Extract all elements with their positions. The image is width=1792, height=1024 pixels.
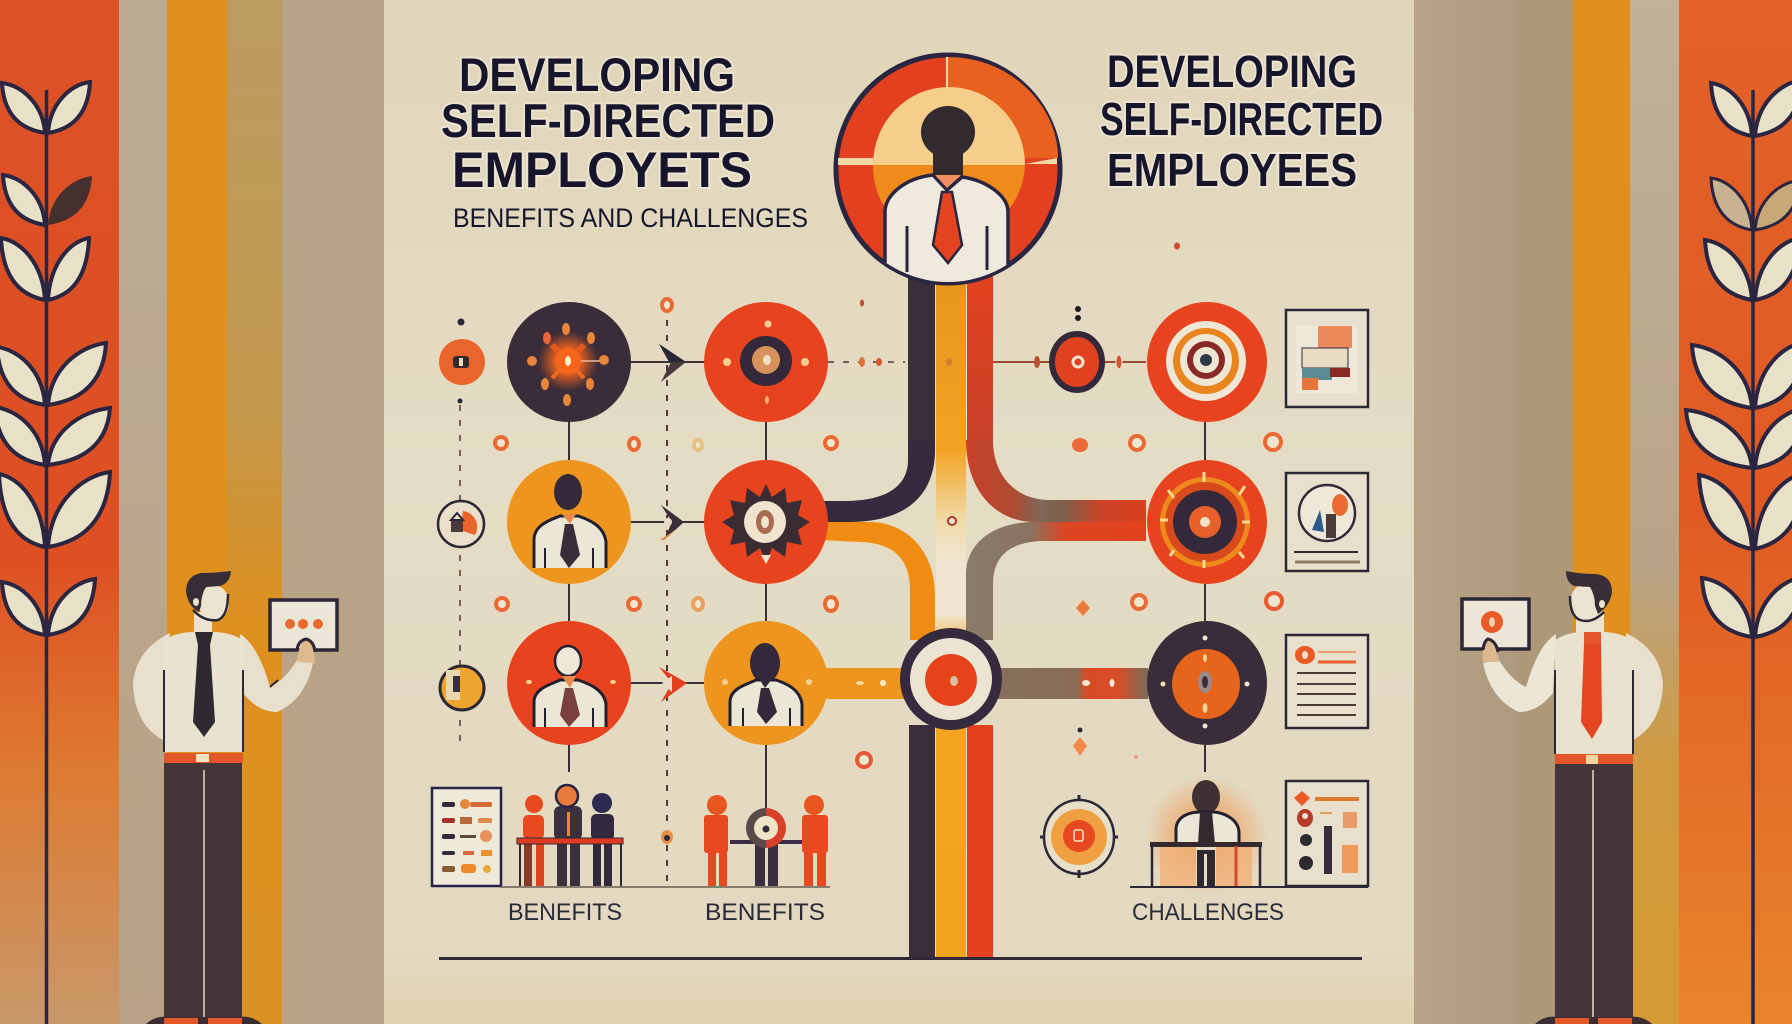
right title	[1100, 46, 1383, 196]
row 1 challenge: target	[1147, 302, 1267, 422]
right title: DEVELOPING	[1107, 46, 1357, 97]
main portrait medallion	[836, 55, 1060, 290]
label: challenges: CHALLENGES	[1132, 899, 1284, 926]
label: benefits 2: BENEFITS	[705, 899, 825, 926]
small floating markers	[458, 242, 1282, 844]
document card 4	[1286, 781, 1368, 886]
row 2 benefit: gear	[704, 460, 828, 584]
left title: SELF-DIRECTED	[441, 94, 775, 147]
connector: right bottom band	[998, 668, 1148, 699]
row 3 left small icon	[440, 666, 484, 710]
document card 1	[1286, 310, 1368, 407]
document card 3	[1286, 635, 1368, 728]
row 3 benefit: person on red	[507, 621, 631, 745]
right title: SELF-DIRECTED	[1100, 93, 1383, 145]
connector: dark branch to benefits	[820, 440, 935, 522]
central vertical trunk bars	[908, 270, 993, 959]
row 1 left small icon	[439, 339, 485, 385]
document card 2	[1286, 473, 1368, 571]
row 1 benefit: focus circle	[704, 302, 828, 422]
left title: EMPLOYETS	[452, 142, 752, 198]
small challenge circle	[1034, 334, 1122, 390]
label: benefits 1: BENEFITS	[508, 899, 622, 926]
right plant	[1686, 80, 1792, 1024]
central hub target	[900, 628, 1002, 730]
row 2 benefit: person on orange	[507, 460, 631, 584]
left plant	[0, 82, 110, 1024]
connector: red upper branch to challenges	[966, 440, 1146, 522]
row 3 challenge: dark target	[1147, 621, 1267, 745]
left title: DEVELOPING	[459, 48, 735, 101]
row 3 arrow	[659, 667, 687, 702]
baseline rule	[439, 957, 1362, 960]
right presenter figure	[1462, 571, 1663, 1024]
scene: challenge target	[1040, 795, 1118, 878]
row 2 left small icon	[438, 501, 484, 547]
row 1 benefit: sun burst in dark circle	[507, 302, 631, 422]
left title: BENEFITS AND CHALLENGES	[453, 203, 808, 233]
scene: team with board	[432, 785, 623, 886]
scene: two people around a target	[704, 795, 828, 886]
row 1 arrow	[659, 344, 686, 382]
left title	[441, 48, 808, 233]
row 2 challenge: dark core	[1147, 460, 1267, 584]
connector: orange branch	[820, 522, 935, 640]
connector: left bottom band	[820, 668, 905, 699]
scene: person at desk	[1144, 775, 1268, 895]
left presenter figure	[133, 571, 337, 1024]
connector lines and dotted guides	[460, 320, 1205, 885]
row 3 benefit: person on orange	[704, 621, 828, 745]
ground lines	[500, 886, 1368, 888]
right title: EMPLOYEES	[1107, 144, 1357, 196]
connector: gray lower branch to challenges	[966, 522, 1146, 640]
row 2 arrow	[660, 505, 684, 540]
